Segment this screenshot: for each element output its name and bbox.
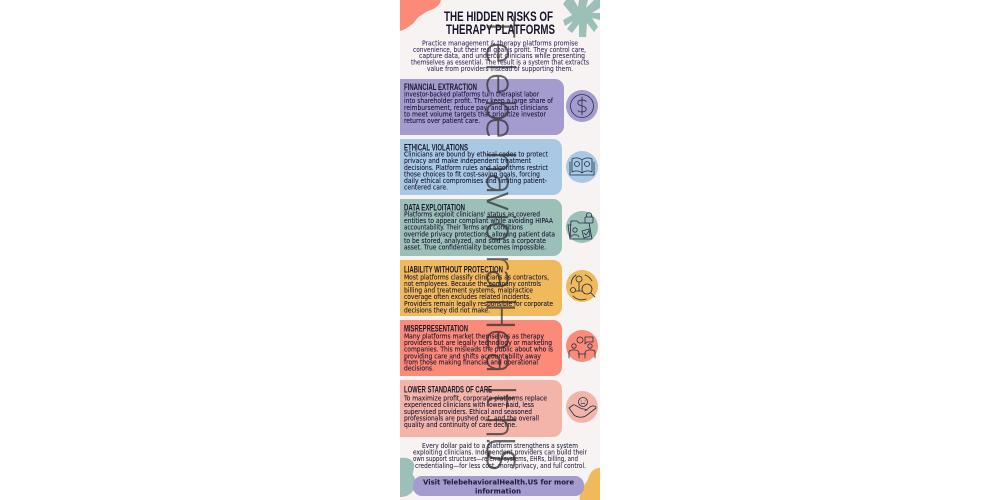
body: misrepresentation: companies. This misleads the public about who is <box>404 344 553 354</box>
body: liability without protection: not employees. Because the company controls <box>404 279 541 288</box>
body: ethical violations: centered care. <box>404 182 448 192</box>
body: lower standards of care: quality and continuity of care decline. <box>404 420 517 429</box>
panel: data exploitation <box>400 199 562 256</box>
call to action button <box>413 476 584 496</box>
heading: ethical violations: ETHICAL VIOLATIONS <box>404 142 468 152</box>
body: liability without protection: coverage often excludes related incidents. <box>404 292 531 301</box>
body: ethical violations: privacy and make independent treatment <box>404 156 531 165</box>
closing text block: exploiting clinicians. Independent providers can build their <box>413 448 587 456</box>
body: ethical violations: decisions. Platform rules and algorithms restrict <box>404 163 548 172</box>
title <box>444 8 555 37</box>
decoration: teal bottom-left blob <box>400 458 416 497</box>
body: liability without protection <box>404 272 553 314</box>
heading: data exploitation: DATA EXPLOITATION <box>404 202 465 212</box>
decoration: teal asterisk star <box>563 0 600 37</box>
intro text block: themselves as essential. The result is a system that extracts <box>411 58 589 66</box>
body: data exploitation: Platforms exploit clinicians' status as covered <box>404 209 540 218</box>
panel: financial extraction <box>400 79 564 135</box>
body: ethical violations: daily ethical compromises and limiting patient- <box>404 176 547 185</box>
intro text block: capture data, and undercut clinicians while presenting <box>419 51 585 60</box>
closing text block: credentialing—for less cost, more privacy, and full control. <box>415 461 586 470</box>
icon: two people talking <box>566 330 598 362</box>
body: ethical violations: those choices to fit cost-saving goals, forcing <box>404 170 540 178</box>
body: misrepresentation: providers but are legally technology or marketing <box>404 338 552 347</box>
body: ethical violations: Clinicians are bound by ethical codes to protect <box>404 149 548 158</box>
title: THE HIDDEN RISKS OF <box>444 8 553 24</box>
body: data exploitation: override privacy protections, allowing patient data <box>404 229 555 238</box>
watermark: rotated site name: TelebehavioralHealth.US <box>478 15 522 472</box>
body: lower standards of care: experienced clinicians with lower-paid, less <box>404 400 534 409</box>
icon: magnifier and people <box>566 270 598 302</box>
intro text block <box>411 38 589 73</box>
body: liability without protection: billing and treatment systems, malpractice <box>404 286 533 294</box>
intro text block: Practice management & therapy platforms promise <box>422 38 578 48</box>
icon: dollar coin <box>566 90 598 122</box>
body: financial extraction: reimbursement, reduce pay, and push clinicians <box>404 103 548 112</box>
heading: liability without protection: LIABILITY WITHOUT PROTECTION <box>404 264 503 274</box>
intro text block: value from providers instead of supporting them. <box>427 64 573 73</box>
panel: liability without protection <box>400 260 562 316</box>
body: liability without protection: Most platforms classify clinicians as contractors, <box>404 272 549 281</box>
body: financial extraction: returns over patient care. <box>404 116 480 125</box>
body: lower standards of care: supervised providers. Ethical and seasoned <box>404 407 532 416</box>
body: liability without protection: decisions they did not make. <box>404 306 490 314</box>
body: liability without protection: Providers remain legally responsible for corporate <box>404 299 553 308</box>
body: financial extraction: into shareholder profit. They keep a large share of <box>404 96 553 105</box>
icon: hand holding sad face <box>566 391 598 423</box>
intro text block: convenience, but their real goal is profit. They control care, <box>413 45 586 54</box>
closing text block: own support structures—referral systems, EHRs, billing, and <box>413 454 578 463</box>
call to action button: information <box>475 488 521 496</box>
body: data exploitation: entities to appear compliant while avoiding HIPAA <box>404 216 553 225</box>
icon: open book <box>566 151 598 183</box>
body: lower standards of care <box>403 393 547 429</box>
icon: locked folder <box>566 211 598 243</box>
body: ethical violations <box>404 149 548 192</box>
panel: misrepresentation <box>400 320 562 376</box>
body: lower standards of care: professionals are pushed out, and the overall <box>404 414 539 422</box>
title: THERAPY PLATFORMS <box>446 21 555 37</box>
body: lower standards of care: To maximize profit, corporate platforms replace <box>403 393 547 402</box>
body: financial extraction: to meet volume targets that prioritize investor <box>404 110 546 118</box>
body: financial extraction <box>404 89 553 125</box>
closing text block <box>413 441 587 470</box>
body: misrepresentation: decisions. <box>404 364 434 372</box>
body: misrepresentation: Many platforms market themselves as therapy <box>404 331 544 340</box>
heading: financial extraction: FINANCIAL EXTRACTION <box>404 82 477 92</box>
heading: lower standards of care: LOWER STANDARDS OF CARE <box>404 384 492 394</box>
body: financial extraction: Investor-backed platforms turn therapist labor <box>404 89 539 98</box>
body: data exploitation: asset. True confidentiality becomes impossible. <box>404 242 546 252</box>
closing text block: Every dollar paid to a platform strengthens a system <box>422 441 578 450</box>
call to action button: Visit TelebehavioralHealth.US for more <box>423 479 574 487</box>
body: data exploitation <box>404 209 555 252</box>
panel: lower standards of care <box>400 380 562 437</box>
body: data exploitation: to be stored, analyzed, and sold as a corporate <box>404 236 546 245</box>
body: misrepresentation: providing care and shifts accountability away <box>404 351 541 360</box>
panel: ethical violations <box>400 139 562 195</box>
body: misrepresentation: from those making financial and operational <box>404 358 538 366</box>
decoration: coral corner blob <box>400 0 441 31</box>
body: data exploitation: accountability. Their Terms and Conditions <box>404 222 523 232</box>
decoration: orange bottom-right blob <box>580 468 600 500</box>
body: misrepresentation <box>404 331 553 372</box>
heading: misrepresentation: MISREPRESENTATION <box>404 324 468 334</box>
